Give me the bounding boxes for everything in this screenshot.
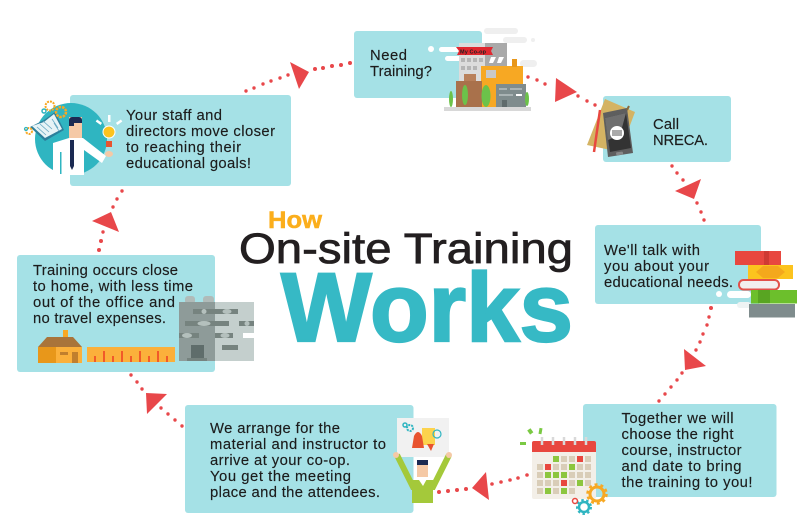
arrow: together to arrange xyxy=(437,472,529,500)
title: On-site Training: On-site Training xyxy=(239,225,573,273)
panel: need training xyxy=(354,31,482,98)
panel: training occurs xyxy=(17,255,215,372)
panel: we arrange xyxy=(185,405,414,513)
icon: faded grey building xyxy=(179,296,254,361)
title xyxy=(239,207,573,362)
text: staff and directors: directors move closer xyxy=(126,124,275,140)
icon: person with book and bulb xyxy=(24,102,122,175)
text: together choose: course, instructor xyxy=(622,443,742,459)
icon: orange ruler strip xyxy=(87,347,175,362)
text: need training: Need xyxy=(370,48,407,64)
text: staff and directors: Your staff and xyxy=(126,108,222,124)
text: we arrange: You get the meeting xyxy=(210,469,351,485)
text: training occurs: to home, with less time xyxy=(33,279,193,295)
panel: talk about needs xyxy=(595,225,761,304)
text: staff and directors: educational goals! xyxy=(126,156,251,172)
text: together choose: the training to you! xyxy=(622,475,752,491)
arrow: need training to call xyxy=(526,75,597,107)
text: training occurs: out of the office and xyxy=(33,295,175,311)
arrow: top left to need training xyxy=(244,61,352,93)
title: Works: Works xyxy=(281,253,573,362)
panel: together choose xyxy=(583,404,776,497)
icon: phone and notepad xyxy=(587,99,635,157)
icon: calendar and gears xyxy=(520,428,606,514)
icon: co-op buildings: My Co-op xyxy=(460,50,487,56)
icon: person holding sign xyxy=(393,418,452,503)
icon: co-op buildings xyxy=(428,28,537,111)
text: we arrange: We arrange for the xyxy=(210,421,340,437)
text: together choose: and date to bring xyxy=(622,459,742,475)
text: together choose: Together we will xyxy=(622,411,734,427)
text: we arrange: place and the attendees. xyxy=(210,485,380,501)
arrow: talk to together xyxy=(657,306,713,403)
text: talk about needs: We'll talk with xyxy=(604,243,700,259)
text: talk about needs: educational needs. xyxy=(604,275,733,291)
text: call nreca: NRECA. xyxy=(653,133,708,149)
panel: staff and directors xyxy=(70,95,291,186)
arrow: training occurs to staff xyxy=(92,189,124,252)
text: staff and directors: to reaching their xyxy=(126,140,241,156)
icon: house xyxy=(38,330,82,363)
text: together choose: choose the right xyxy=(622,427,734,443)
title: How: How xyxy=(268,207,322,234)
text: training occurs: Training occurs close xyxy=(33,263,178,279)
text: we arrange: material and instructor to xyxy=(210,437,386,453)
text: we arrange: arrive at your co-op. xyxy=(210,453,350,469)
panel: call nreca xyxy=(603,96,731,162)
arrow: call to talk xyxy=(670,164,706,222)
icon: stack of books xyxy=(716,251,797,318)
text: training occurs: no travel expenses. xyxy=(33,311,166,327)
arrow: arrange to training occurs xyxy=(129,373,184,428)
text: talk about needs: you about your xyxy=(604,259,709,275)
text: call nreca: Call xyxy=(653,117,679,133)
text: need training: Training? xyxy=(370,64,432,80)
